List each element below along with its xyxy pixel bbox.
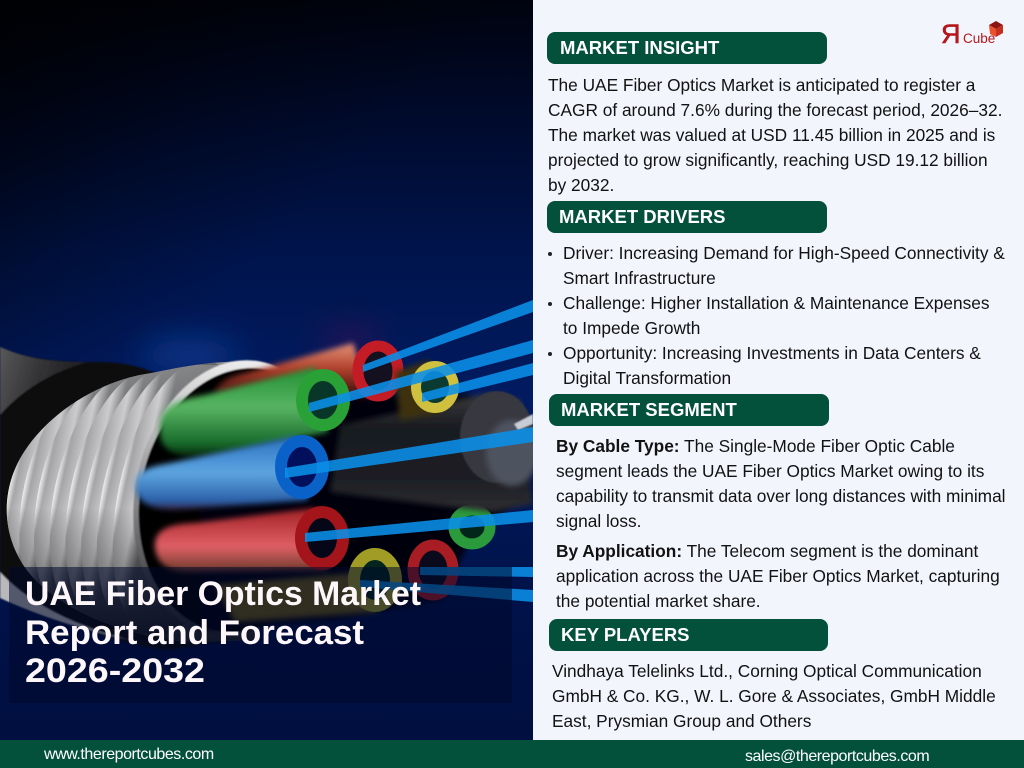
title: 2026-2032 xyxy=(25,652,205,690)
footer xyxy=(0,740,1024,768)
heading: market segment xyxy=(549,394,829,426)
logo mark R: Я xyxy=(941,19,960,49)
text: cable type segment: signal loss. xyxy=(556,511,642,531)
yellow top tube xyxy=(395,360,454,420)
list: market drivers: Challenge: Higher Installation & Maintenance Expenses xyxy=(563,293,990,313)
text: cable type segment xyxy=(556,436,1006,531)
text: application segment: application across the UAE Fiber Optics Market, capturing xyxy=(556,566,1000,586)
cable jacket xyxy=(0,347,230,650)
panel: cable photo illustration xyxy=(0,0,533,740)
text: cable type segment: capability to transmit data over long distances with minimal xyxy=(556,486,1006,506)
blue light fibers xyxy=(285,300,533,602)
title backdrop xyxy=(9,567,512,703)
dark red tube xyxy=(155,508,343,572)
title xyxy=(25,575,421,690)
text: key players: East, Prysmian Group and Others xyxy=(552,711,811,731)
text: market insight: projected to grow significantly, reaching USD 19.12 billion xyxy=(548,150,988,170)
heading: market insight xyxy=(547,32,827,64)
green tube xyxy=(160,367,344,457)
heading: market segment: MARKET SEGMENT xyxy=(561,399,737,420)
list: market drivers xyxy=(548,243,1005,388)
red top tube xyxy=(214,343,398,400)
footer website: www.thereportcubes.com xyxy=(44,746,214,763)
heading: market drivers: MARKET DRIVERS xyxy=(559,206,726,227)
background glows xyxy=(140,330,380,371)
cable opening xyxy=(110,343,366,651)
blue tube xyxy=(136,436,323,510)
lower red tube xyxy=(413,545,453,595)
text: application segment: By Application: The Telecom segment is the dominant xyxy=(556,541,978,561)
text: cable type segment: segment leads the UAE Fiber Optics Market owing to its xyxy=(556,461,984,481)
title: UAE Fiber Optics Market xyxy=(25,575,421,613)
list: market drivers: Digital Transformation xyxy=(563,368,731,388)
heading: key players: KEY PLAYERS xyxy=(561,624,690,645)
text: market insight: The UAE Fiber Optics Market is anticipated to register a xyxy=(548,75,975,95)
text: key players xyxy=(552,661,996,731)
footer email: sales@thereportcubes.com xyxy=(745,748,929,765)
text: application segment xyxy=(556,541,1000,611)
lower green tube xyxy=(454,510,490,544)
background xyxy=(0,0,533,741)
text: market insight: CAGR of around 7.6% during the forecast period, 2026–32. xyxy=(548,100,1002,120)
logo wordmark: Cube xyxy=(963,31,995,46)
dark central tube xyxy=(330,391,538,512)
list: market drivers: Driver: Increasing Demand for High-Speed Connectivity & xyxy=(563,243,1005,263)
text: application segment: the potential market share. xyxy=(556,591,761,611)
text: key players: Vindhaya Telelinks Ltd., Corning Optical Communication xyxy=(552,661,982,681)
icon: cube xyxy=(989,21,1003,37)
heading: key players xyxy=(549,619,828,651)
text: cable type segment: By Cable Type: The Single-Mode Fiber Optic Cable xyxy=(556,436,955,456)
heading: market insight: MARKET INSIGHT xyxy=(560,37,719,58)
text: market insight: by 2032. xyxy=(548,175,614,195)
text: key players: GmbH & Co. KG., W. L. Gore & Associates, GmbH Middle xyxy=(552,686,996,706)
title: Report and Forecast xyxy=(25,614,364,652)
text: market insight xyxy=(548,75,1002,195)
list: market drivers: Opportunity: Increasing Investments in Data Centers & xyxy=(563,343,981,363)
text: market insight: The market was valued at USD 11.45 billion in 2025 and is xyxy=(548,125,995,145)
silver armour xyxy=(6,362,260,642)
interior shadow xyxy=(200,395,515,630)
list: market drivers: Smart Infrastructure xyxy=(563,268,716,288)
list: market drivers: to Impede Growth xyxy=(563,318,700,338)
olive tube xyxy=(215,554,396,622)
logo xyxy=(941,19,1003,49)
heading: market drivers xyxy=(547,201,827,233)
